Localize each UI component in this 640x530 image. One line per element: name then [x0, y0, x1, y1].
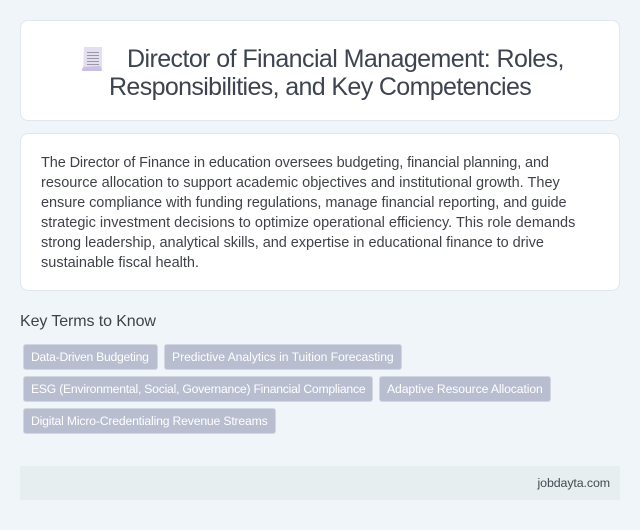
key terms tags: Predictive Analytics in Tuition Forecasting [172, 350, 394, 364]
key terms tags: Adaptive Resource Allocation [387, 382, 543, 396]
summary text [41, 155, 575, 271]
title [109, 45, 564, 101]
summary text: strategic investment decisions to optimize operational efficiency. This role demands [41, 215, 575, 231]
footer source: jobdayta.com [538, 476, 610, 490]
summary text: resource allocation to support academic objectives and institutional growth. They [41, 175, 560, 191]
key terms tags: Digital Micro-Credentialing Revenue Streams [31, 414, 268, 428]
summary text: The Director of Finance in education oversees budgeting, financial planning, and [41, 155, 549, 171]
footer bar [20, 466, 620, 500]
title: Director of Financial Management: Roles, [127, 45, 564, 73]
summary text: sustainable fiscal health. [41, 255, 199, 271]
title: Responsibilities, and Key Competencies [109, 73, 531, 101]
heading: key terms: Key Terms to Know [20, 313, 156, 330]
title panel [20, 20, 620, 121]
key terms tags: ESG (Environmental, Social, Governance) Financial Compliance [31, 382, 365, 396]
icon: document scroll [82, 47, 102, 71]
key terms tags [23, 344, 551, 434]
summary panel [20, 133, 620, 291]
key terms tags: Data-Driven Budgeting [31, 350, 149, 364]
summary text: strong leadership, analytical skills, and expertise in educational finance to drive [41, 235, 544, 251]
summary text: ensure compliance with funding regulations, manage financial reporting, and guide [41, 195, 567, 211]
